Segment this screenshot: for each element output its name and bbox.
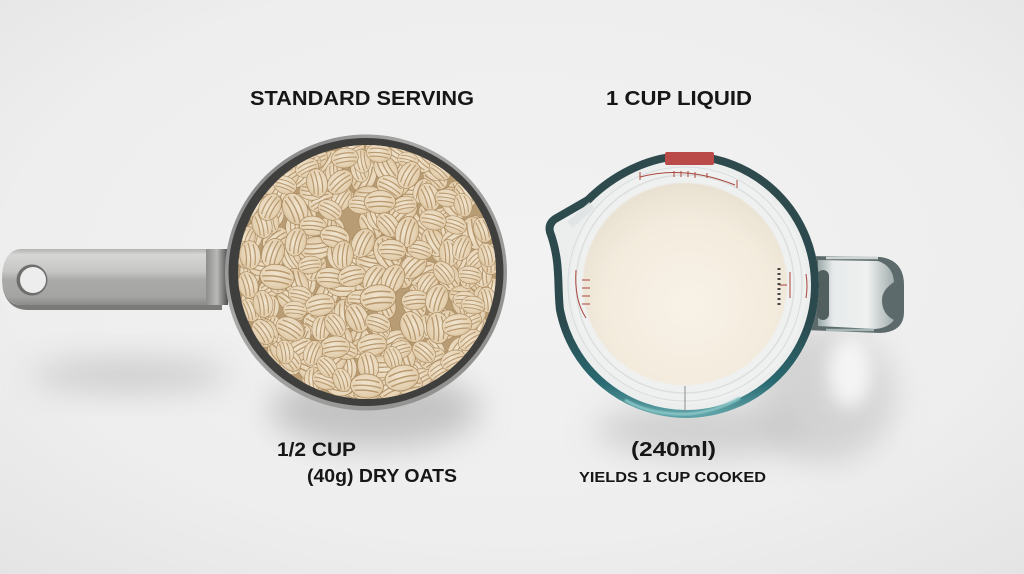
label: yields 1 cup cooked: YIELDS 1 CUP COOKED	[579, 469, 766, 486]
shadows	[30, 327, 895, 463]
cup handle	[2, 249, 228, 310]
jug handle	[805, 256, 904, 333]
label: 1/2 cup: 1/2 CUP	[277, 440, 356, 461]
red handle marker	[665, 152, 714, 165]
jug body and rim	[545, 152, 819, 418]
milk	[583, 183, 787, 385]
heading: standard serving: STANDARD SERVING	[250, 88, 474, 110]
label: 40g dry oats: (40g) DRY OATS	[307, 466, 457, 486]
measurement markings	[576, 171, 807, 412]
label: 240ml: (240ml)	[631, 439, 716, 461]
heading: 1 cup liquid: 1 CUP LIQUID	[606, 88, 752, 110]
oats	[238, 145, 496, 399]
measuring cup with oats	[2, 134, 507, 410]
cup rim	[225, 134, 507, 410]
liquid measuring jug	[545, 152, 904, 418]
